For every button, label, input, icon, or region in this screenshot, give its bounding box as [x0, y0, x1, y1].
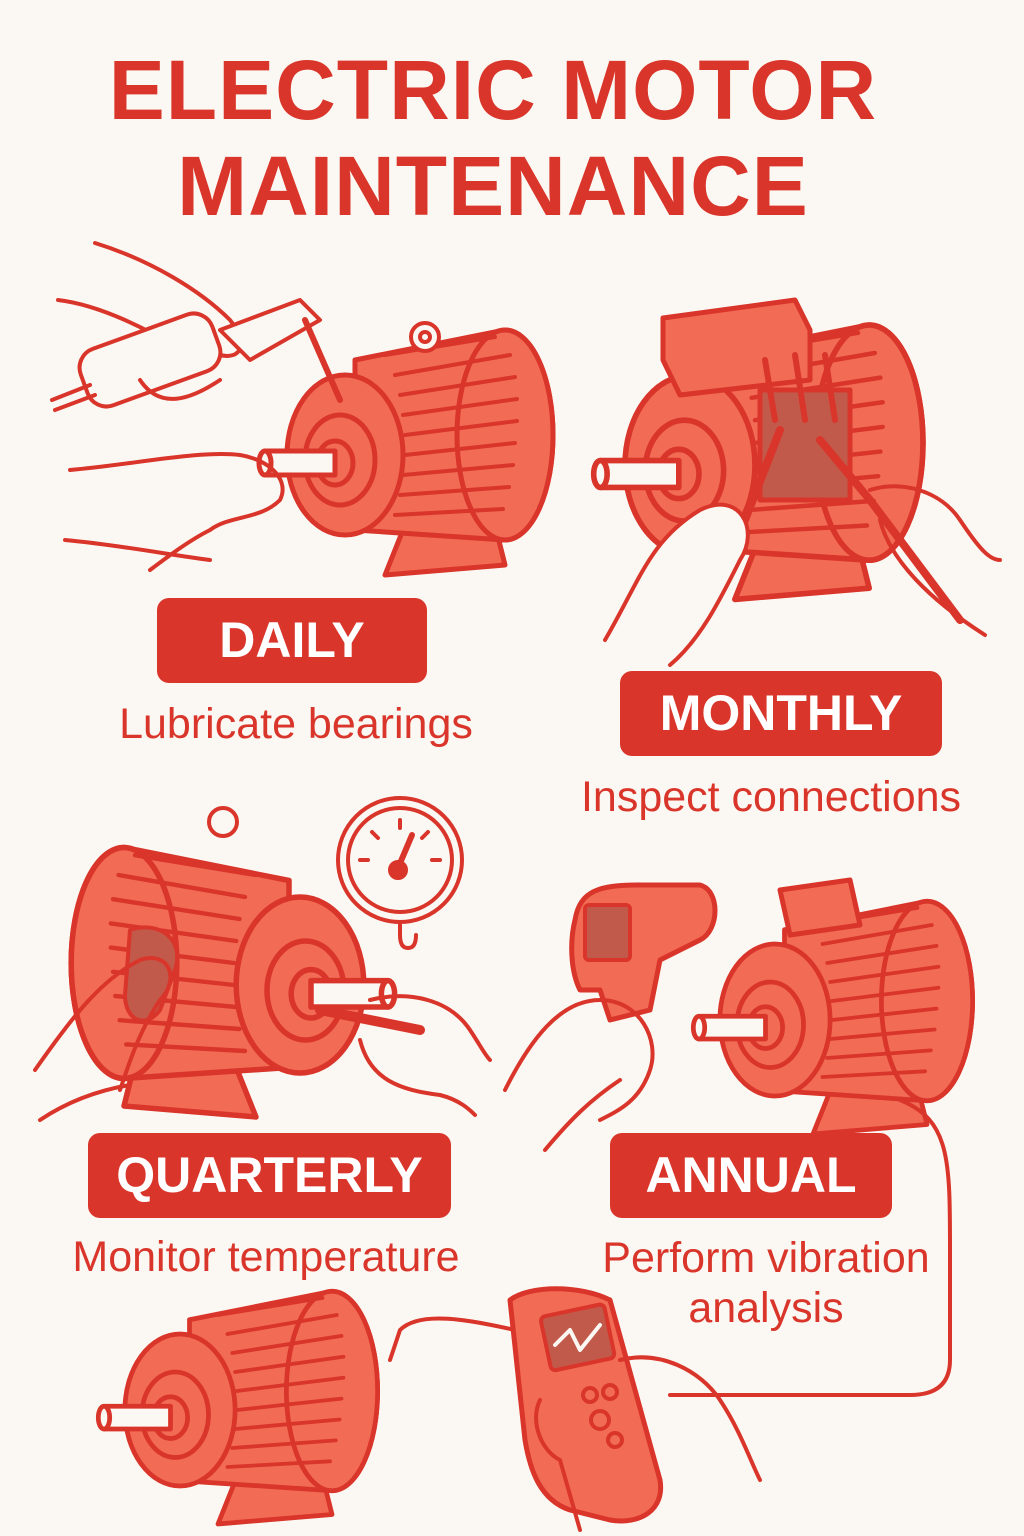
text: annual task: analysis — [688, 1284, 844, 1332]
badge: annual: ANNUAL — [645, 1147, 857, 1203]
title: MAINTENANCE — [177, 139, 809, 233]
title — [109, 43, 877, 233]
quarterly hands — [35, 958, 490, 1120]
annual motor — [693, 880, 973, 1134]
bottom motor — [98, 1291, 378, 1524]
text: quarterly task: Monitor temperature — [72, 1233, 460, 1281]
text: monthly task: Inspect connections — [581, 773, 961, 821]
cable — [670, 1100, 950, 1395]
title: ELECTRIC MOTOR — [109, 43, 877, 137]
badge: daily: DAILY — [219, 612, 365, 668]
badge: quarterly — [88, 1133, 451, 1218]
text: annual task — [602, 1234, 930, 1332]
monthly hands & probes — [605, 430, 1000, 665]
badge: quarterly: QUARTERLY — [116, 1147, 423, 1203]
thermometer gun — [505, 885, 715, 1150]
monthly motor — [594, 300, 923, 599]
daily motor — [259, 323, 553, 575]
badge: monthly: MONTHLY — [660, 685, 902, 741]
text: daily task: Lubricate bearings — [119, 700, 473, 748]
badge: daily — [157, 598, 427, 683]
badge: annual — [610, 1133, 892, 1218]
quarterly motor — [71, 808, 395, 1117]
daily hands & grease gun — [52, 243, 340, 570]
badge: monthly — [620, 671, 942, 756]
gauge icon — [338, 798, 462, 948]
vibration meter — [510, 1289, 760, 1530]
text: annual task: Perform vibration — [602, 1234, 930, 1282]
